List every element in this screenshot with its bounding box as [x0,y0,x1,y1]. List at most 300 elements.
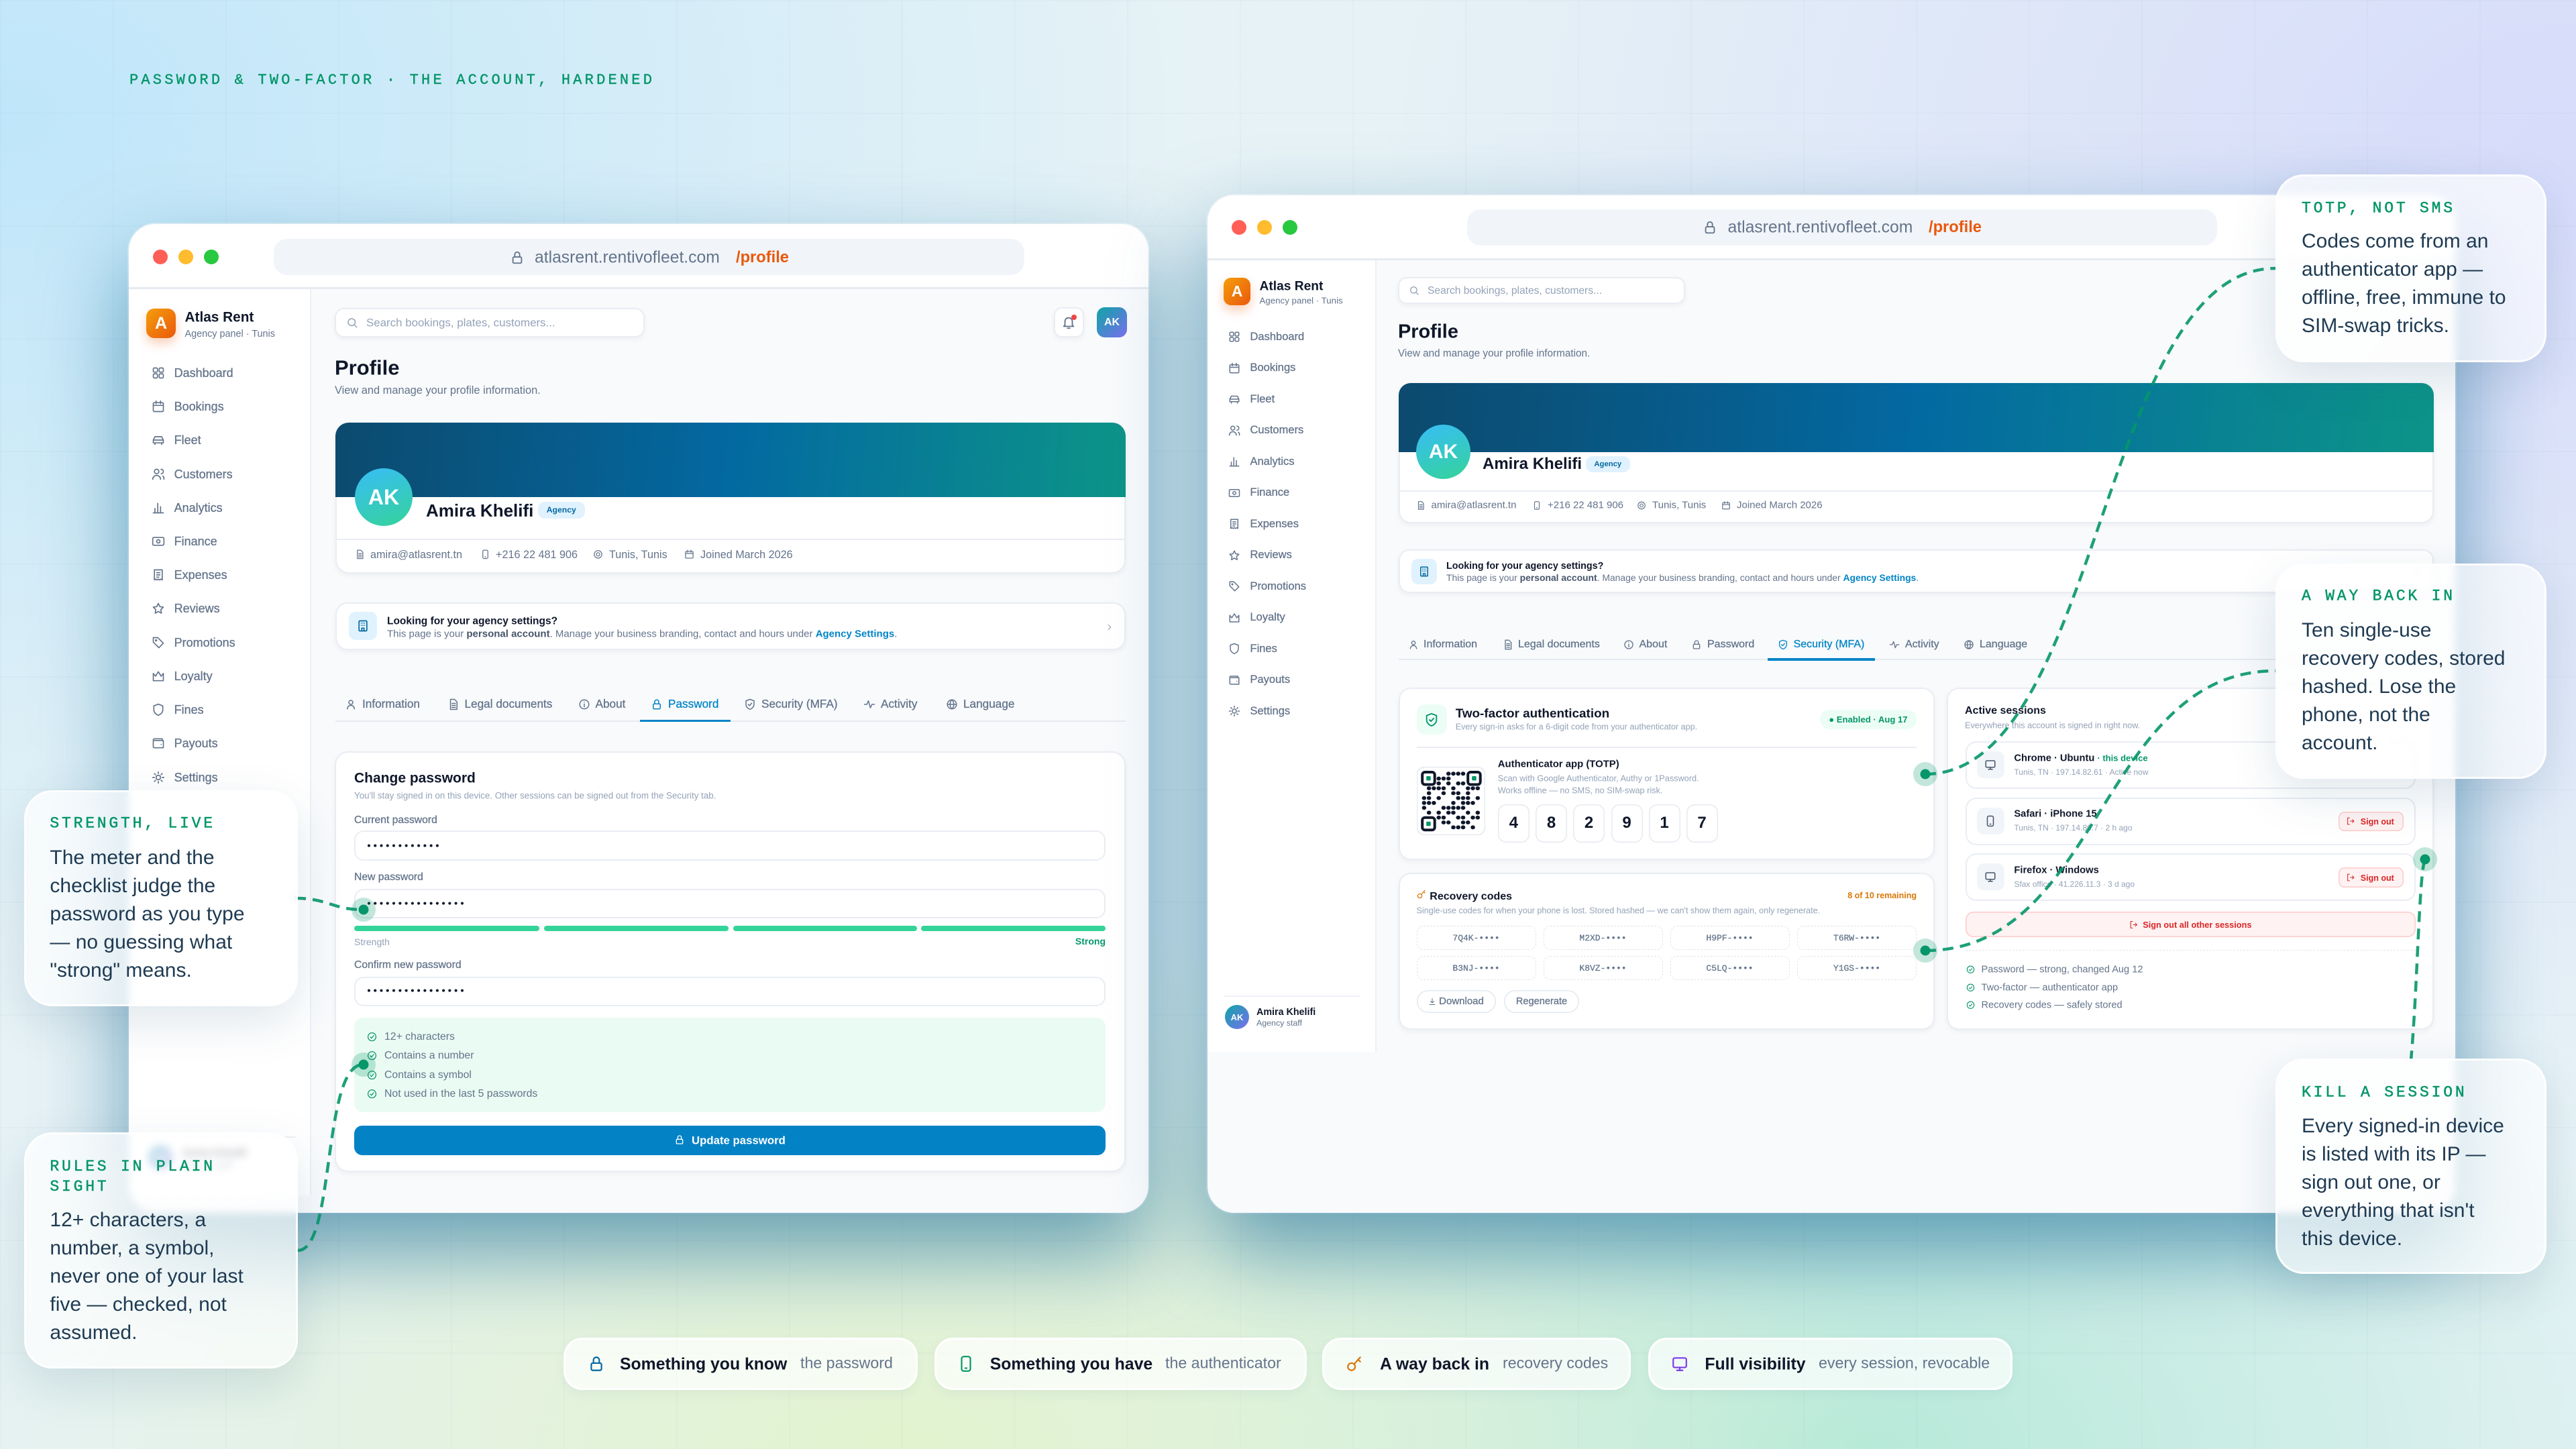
search placeholder: Search bookings, plates, customers... [366,316,555,329]
remaining count: 8 of 10 remaining [1847,891,1917,900]
callout label: SIGHT [50,1178,109,1195]
panel: recovery codes [1399,873,1935,1030]
callout body: Every signed-in device [2302,1115,2504,1136]
code [1417,956,1536,980]
top bar avatar [1097,307,1127,337]
tab: Language: Language [963,697,1014,710]
code: M2XD-•••• [1579,932,1627,943]
icon: button lock [674,1134,685,1145]
code: H9PF-•••• [1706,932,1754,943]
sign out button: Sign out [2361,817,2394,826]
callout body [2302,227,2536,340]
nav: Bookings: Bookings [1250,362,1295,374]
logo: A [1232,282,1242,300]
rule: number: Contains a number [384,1050,474,1061]
tab: Security active: Security (MFA) [1794,639,1864,649]
callout body: recovery codes, stored [2302,647,2505,669]
callout body: account. [2302,731,2377,754]
card title: Active sessions [1965,704,2046,716]
status: password: Password — strong, changed Aug 12 [1982,964,2143,975]
callout body: this device. [2302,1228,2402,1249]
dots: current: •••••••••••• [366,841,441,851]
callout body: never one of your last [50,1265,244,1287]
callout body [50,844,291,985]
pill note: the password [800,1354,893,1371]
active tab underline [1767,658,1874,660]
address bar [1467,209,2217,246]
url path: /profile [1929,219,1982,236]
digit [1649,804,1680,843]
rule: symbol: Contains a symbol [384,1069,472,1081]
title bar [129,224,1148,289]
logo [146,309,176,338]
icon: bell [1063,317,1075,329]
strength meter [354,926,1106,931]
nav: Expenses: Expenses [174,568,227,581]
icon: lock [588,1355,605,1373]
authenticator instructions: Scan with Google Authenticator, Authy or 1Password. [1498,774,1699,784]
role badge: Agency [1594,460,1621,468]
code: K8VZ-•••• [1579,963,1627,973]
nav: Analytics [1228,455,1295,468]
window control: green [204,250,219,264]
tab: Language: Language [1980,639,2027,649]
label: new: New password [354,871,423,883]
brand subtitle: Agency panel · Tunis [185,328,275,339]
nav: Dashboard: Dashboard [174,366,233,380]
button: download: Download [1439,996,1484,1007]
panel: agency settings notice [1399,549,2434,593]
meter label: Strength [354,936,390,947]
tab: Legal documents: Legal documents [464,697,552,710]
code [1797,956,1917,980]
name: Amira Khelifi [426,500,533,521]
card description: Everywhere this account is signed in right now. [1965,721,2140,731]
nav: Reviews [1228,549,1292,561]
pill note: the authenticator [1165,1354,1281,1371]
sidebar [129,289,311,1195]
update button [354,1126,1106,1155]
nav: Settings: Settings [174,770,218,784]
callout label: KILL A SESSION [2302,1083,2467,1101]
meta: joined: Joined March 2026 [700,548,793,560]
tab: Information: Information [362,697,420,710]
callout body: 12+ characters, a [50,1209,206,1231]
tab: Password active: Password [668,697,718,710]
callout body: number, a symbol, [50,1237,215,1259]
brand name: Atlas Rent [185,310,254,325]
nav: Analytics: Analytics [1250,455,1295,468]
nav: Settings [152,770,218,785]
session title: Firefox · Windows [2014,865,2099,876]
icon: phone [957,1355,975,1373]
url path: /profile [736,249,789,266]
nav: Customers: Customers [1250,424,1303,436]
meta: joined: Joined March 2026 [1737,500,1823,511]
digit: 4 [1509,814,1518,832]
nav: Promotions: Promotions [1250,580,1306,592]
session title: Chrome · Ubuntu · this device [2014,753,2148,764]
code [1797,926,1917,950]
sign out all button [1966,912,2416,937]
pill: a way back in [1322,1338,1631,1390]
callout body: is listed with its IP — [2302,1143,2486,1165]
arrow: totp [1913,268,2275,786]
nav: Loyalty [1228,612,1285,624]
nav: Payouts [1228,674,1290,686]
page subtitle: View and manage your profile information. [1398,347,1590,359]
authenticator title: Authenticator app (TOTP) [1498,759,1619,770]
digit [1536,804,1567,843]
icon: search [347,318,357,327]
callout label: TOTP, NOT SMS [2302,199,2455,217]
meta: email: amira@atlasrent.tn [1432,500,1516,511]
tabs baseline [335,720,1126,722]
digit [1498,804,1529,843]
session detail: Sfax office · 41.226.11.3 · 3 d ago [2014,879,2135,889]
nav: Finance [152,534,217,547]
panel: change password form [335,751,1126,1172]
status: two-factor: Two-factor — authenticator app [1982,982,2118,993]
dots: new: •••••••••••••••• [366,898,466,909]
code [1670,956,1790,980]
pill title: Something you know [620,1355,787,1373]
session detail: Tunis, TN · 197.14.80.7 · 2 h ago [2014,823,2132,833]
banner [1399,383,2434,452]
avatar [1416,425,1470,479]
session detail: Tunis, TN · 197.14.82.61 · Active now [2014,767,2148,777]
role badge [538,502,585,519]
code: B3NJ-•••• [1452,963,1500,973]
name: Amira Khelifi [1483,455,1582,472]
tab: About: About [596,697,625,710]
tab: Activity [1889,639,1939,649]
nav: Loyalty [153,669,213,683]
callout body: assumed. [50,1322,137,1344]
sign out button: Sign out [2361,873,2394,883]
role badge [1586,456,1630,472]
callout body: phone, not the [2302,703,2430,726]
checklist [354,1018,1106,1112]
nav: Loyalty: Loyalty [1250,611,1285,623]
nav: Payouts [153,737,218,750]
QR code [1417,767,1485,835]
nav: Expenses [1228,518,1299,530]
callout: sessions [2275,1059,2546,1274]
callout body: SIM-swap tricks. [2302,315,2449,337]
tab: Information: Information [1424,639,1477,649]
pill note: every session, revocable [1819,1354,1990,1371]
sidebar user avatar: AK [154,1152,166,1162]
sidebar user name: Amira Khelifi [182,1147,247,1159]
status pill: ● Enabled · Aug 17 [1829,714,1908,724]
icon: chevron [2414,568,2423,576]
meta: email: amira@atlasrent.tn [370,548,462,560]
nav: Dashboard [1228,331,1304,343]
card description: Every sign-in asks for a 6-digit code from your authenticator app. [1456,722,1697,732]
divider [335,539,1126,540]
address bar [274,239,1024,275]
tab: Password active [651,698,718,710]
icon: monitor [1977,751,2004,778]
session row: Chrome [1966,741,2416,789]
nav: Fines: Fines [174,703,204,716]
callout label [50,1157,284,1197]
callout body: — no guessing what [50,931,232,953]
brand subtitle: Agency panel · Tunis [1260,296,1343,306]
avatar [355,468,413,526]
window control: red [153,250,168,264]
digit: 8 [1547,814,1556,832]
nav: Reviews: Reviews [1250,549,1292,561]
card description: Single-use codes for when your phone is lost. Stored hashed — we can't show them again, only regenerate. [1417,906,1820,916]
nav: Finance: Finance [1250,486,1289,498]
tab: Language [946,698,1014,710]
title bar [1208,195,2455,260]
code: T6RW-•••• [1833,932,1880,943]
icon: key [1417,890,1426,899]
nav: Bookings [1228,362,1295,374]
rule: length: 12+ characters [384,1031,455,1042]
nav: Bookings [153,400,224,413]
pill: something you know [564,1338,918,1390]
callout label: A WAY BACK IN [2302,588,2455,605]
search placeholder: Search bookings, plates, customers... [1428,285,1602,297]
pill title: Something you have [990,1355,1152,1373]
url: atlasrent.rentivofleet.com [535,248,720,266]
nav: Settings: Settings [1250,705,1290,717]
digit: 2 [1585,814,1593,832]
window control: amber [178,250,193,264]
meta: phone: +216 22 481 906 [1548,500,1623,511]
active tab underline [640,719,731,722]
callout body: password as you type [50,903,245,925]
card title: Two-factor authentication [1456,706,1609,720]
authenticator note: Works offline — no SMS, no SIM-swap risk. [1498,786,1662,796]
tab: Security: Security (MFA) [761,697,838,710]
digit [1573,804,1605,843]
icon: building [349,612,377,640]
callout label: STRENGTH, LIVE [50,814,215,832]
dashed divider [1966,950,2416,951]
panel: profile card [335,423,1126,574]
sign out all button: Sign out all other sessions [2143,920,2251,930]
card title: Recovery codes [1430,891,1512,902]
heading: kicker: PASSWORD & TWO-FACTOR · THE ACCOUNT, HARDENED [129,71,655,89]
callout body: The meter and the [50,847,215,869]
sidebar user name: Amira Khelifi [1256,1006,1316,1017]
arrow: rules [298,1053,376,1250]
input: new [354,889,1106,918]
avatar: AK [368,484,399,508]
pill: something you have [934,1338,1307,1390]
meter value: Strong [1075,935,1106,946]
meta: location: Tunis, Tunis [609,548,667,560]
nav: Fines [153,703,204,716]
search box [1398,277,1685,304]
nav: Customers [1228,424,1303,436]
icon: lock [1703,220,1717,235]
callout body: checklist judge the [50,875,215,897]
code: Y1GS-•••• [1833,963,1880,973]
callout body: Ten single-use [2302,619,2431,641]
digit [1686,804,1717,843]
nav: Payouts: Payouts [1250,674,1290,686]
nav: Reviews [153,601,220,614]
icon box: shield [1417,704,1446,735]
tab: Activity: Activity [1905,639,1939,649]
callout body: five — checked, not [50,1293,227,1316]
input: current [354,830,1106,861]
icon: monitor [1671,1355,1688,1373]
url: atlasrent.rentivofleet.com [1728,218,1913,236]
session row: Safari [1966,798,2416,845]
nav: Finance: Finance [174,534,217,547]
panel: active sessions [1947,688,2434,1030]
button: download [1417,990,1496,1013]
code [1543,956,1662,980]
tab: Activity [863,698,917,710]
digit [1611,804,1642,843]
nav: Fines [1228,643,1277,655]
button: regenerate: Regenerate [1516,996,1567,1007]
window control: amber [1257,220,1272,235]
icon: lock [513,251,522,264]
nav: Expenses: Expenses [1250,518,1299,530]
callout body: everything that isn't [2302,1199,2475,1221]
tab: Activity: Activity [881,697,917,710]
notification dot [1071,315,1077,320]
tab: About [578,698,625,710]
nav: Promotions: Promotions [174,636,235,649]
icon: key [1346,1355,1363,1373]
nav: Fleet: Fleet [1250,393,1275,405]
nav: Loyalty: Loyalty [174,669,213,683]
icon box: building [1411,559,1437,584]
arrow: strength [295,898,376,922]
sign out button [2339,812,2404,831]
callout label: RULES IN PLAIN [50,1158,215,1175]
arrow: sessions [2411,847,2437,1060]
digit: 7 [1697,814,1707,832]
role badge: Agency [547,505,576,515]
code [1543,926,1662,950]
icon: search [1409,285,1419,296]
callout body: authenticator app — [2302,258,2483,280]
dots: confirm: •••••••••••••••• [366,985,466,996]
button: regenerate [1504,990,1579,1013]
nav: Fleet: Fleet [174,433,201,447]
sidebar user avatar [148,1145,172,1169]
nav: Analytics [153,500,223,515]
digit: 1 [1660,814,1669,832]
brand name: Atlas Rent [1260,279,1323,293]
callout: recovery [2275,564,2546,779]
code [1670,926,1790,950]
notice text: This page is your personal account. Manage your business branding, contact and hours under Agency Settings. [387,628,897,640]
callout body: Codes come from an [2302,230,2488,252]
icon: chevron [1105,623,1114,632]
panel: agency settings notice [335,602,1126,650]
callout body [2302,616,2536,757]
nav: Bookings: Bookings [174,400,224,413]
nav: Settings [1228,705,1290,717]
label: current: Current password [354,814,437,826]
nav: Fleet [153,433,201,447]
page title: Profile [1398,321,1458,343]
divider [1399,490,2434,492]
logo: A [155,314,167,333]
icon glyph: building [1418,566,1430,578]
sign out button [2339,867,2404,888]
rule: history: Not used in the last 5 passwords [384,1088,537,1099]
form title: Change password [354,771,476,786]
callout body: "strong" means. [50,959,192,981]
digit: 9 [1622,814,1631,832]
page subtitle: View and manage your profile information. [335,384,541,396]
sidebar user avatar: AK [1231,1012,1243,1022]
search box [335,308,645,337]
sidebar [1208,260,1377,1052]
status pill [1820,710,1917,729]
pill note: recovery codes [1503,1354,1608,1371]
code [1417,926,1536,950]
panel: right browser window, security [1208,195,2455,1213]
panel: two-factor authentication [1399,688,1935,860]
button label: Update password [692,1134,786,1146]
avatar: AK [1429,440,1458,463]
nav: Customers: Customers [174,467,233,480]
window control: green [1283,220,1297,235]
input: confirm [354,977,1106,1006]
code: 7Q4K-•••• [1452,932,1500,943]
banner [335,423,1126,497]
nav: Fleet [1228,393,1275,405]
meta: location: Tunis, Tunis [1652,500,1706,511]
callout: rules [24,1132,298,1368]
notice text: This page is your personal account. Manage your business branding, contact and hours under Agency Settings. [1446,572,1919,583]
session title: Safari · iPhone 15 [2014,809,2097,820]
nav: Dashboard: Dashboard [1250,331,1304,343]
sidebar divider [1224,996,1360,997]
notice title: Looking for your agency settings? [387,615,557,627]
callout body [50,1206,291,1347]
form description: You'll stay signed in on this device. Other sessions can be signed out from the Security tab. [354,790,716,800]
sidebar user role: Agency staff [1256,1018,1302,1027]
nav: Fines: Fines [1250,643,1277,655]
callout body: offline, free, immune to [2302,286,2506,309]
nav: Payouts: Payouts [174,737,218,750]
sidebar user role: Agency staff [182,1160,232,1170]
panel: left browser window, change password [129,224,1148,1213]
nav: Finance [1228,487,1289,499]
nav: Reviews: Reviews [174,601,220,614]
notice title: Looking for your agency settings? [1446,561,1603,572]
callout body: sign out one, or [2302,1171,2440,1193]
label: confirm: Confirm new password [354,959,462,971]
callout: totp [2275,174,2546,362]
sidebar user avatar [1225,1005,1249,1029]
tab: Password: Password [1707,639,1754,649]
callout: strength [24,790,298,1006]
window control: red [1232,220,1246,235]
pill: full visibility [1648,1338,2012,1390]
tab: About [1623,639,1667,649]
pill title: A way back in [1380,1355,1489,1373]
icon: monitor [1977,863,2004,890]
session row: Firefox [1966,853,2416,901]
code: C5LQ-•••• [1706,963,1754,973]
